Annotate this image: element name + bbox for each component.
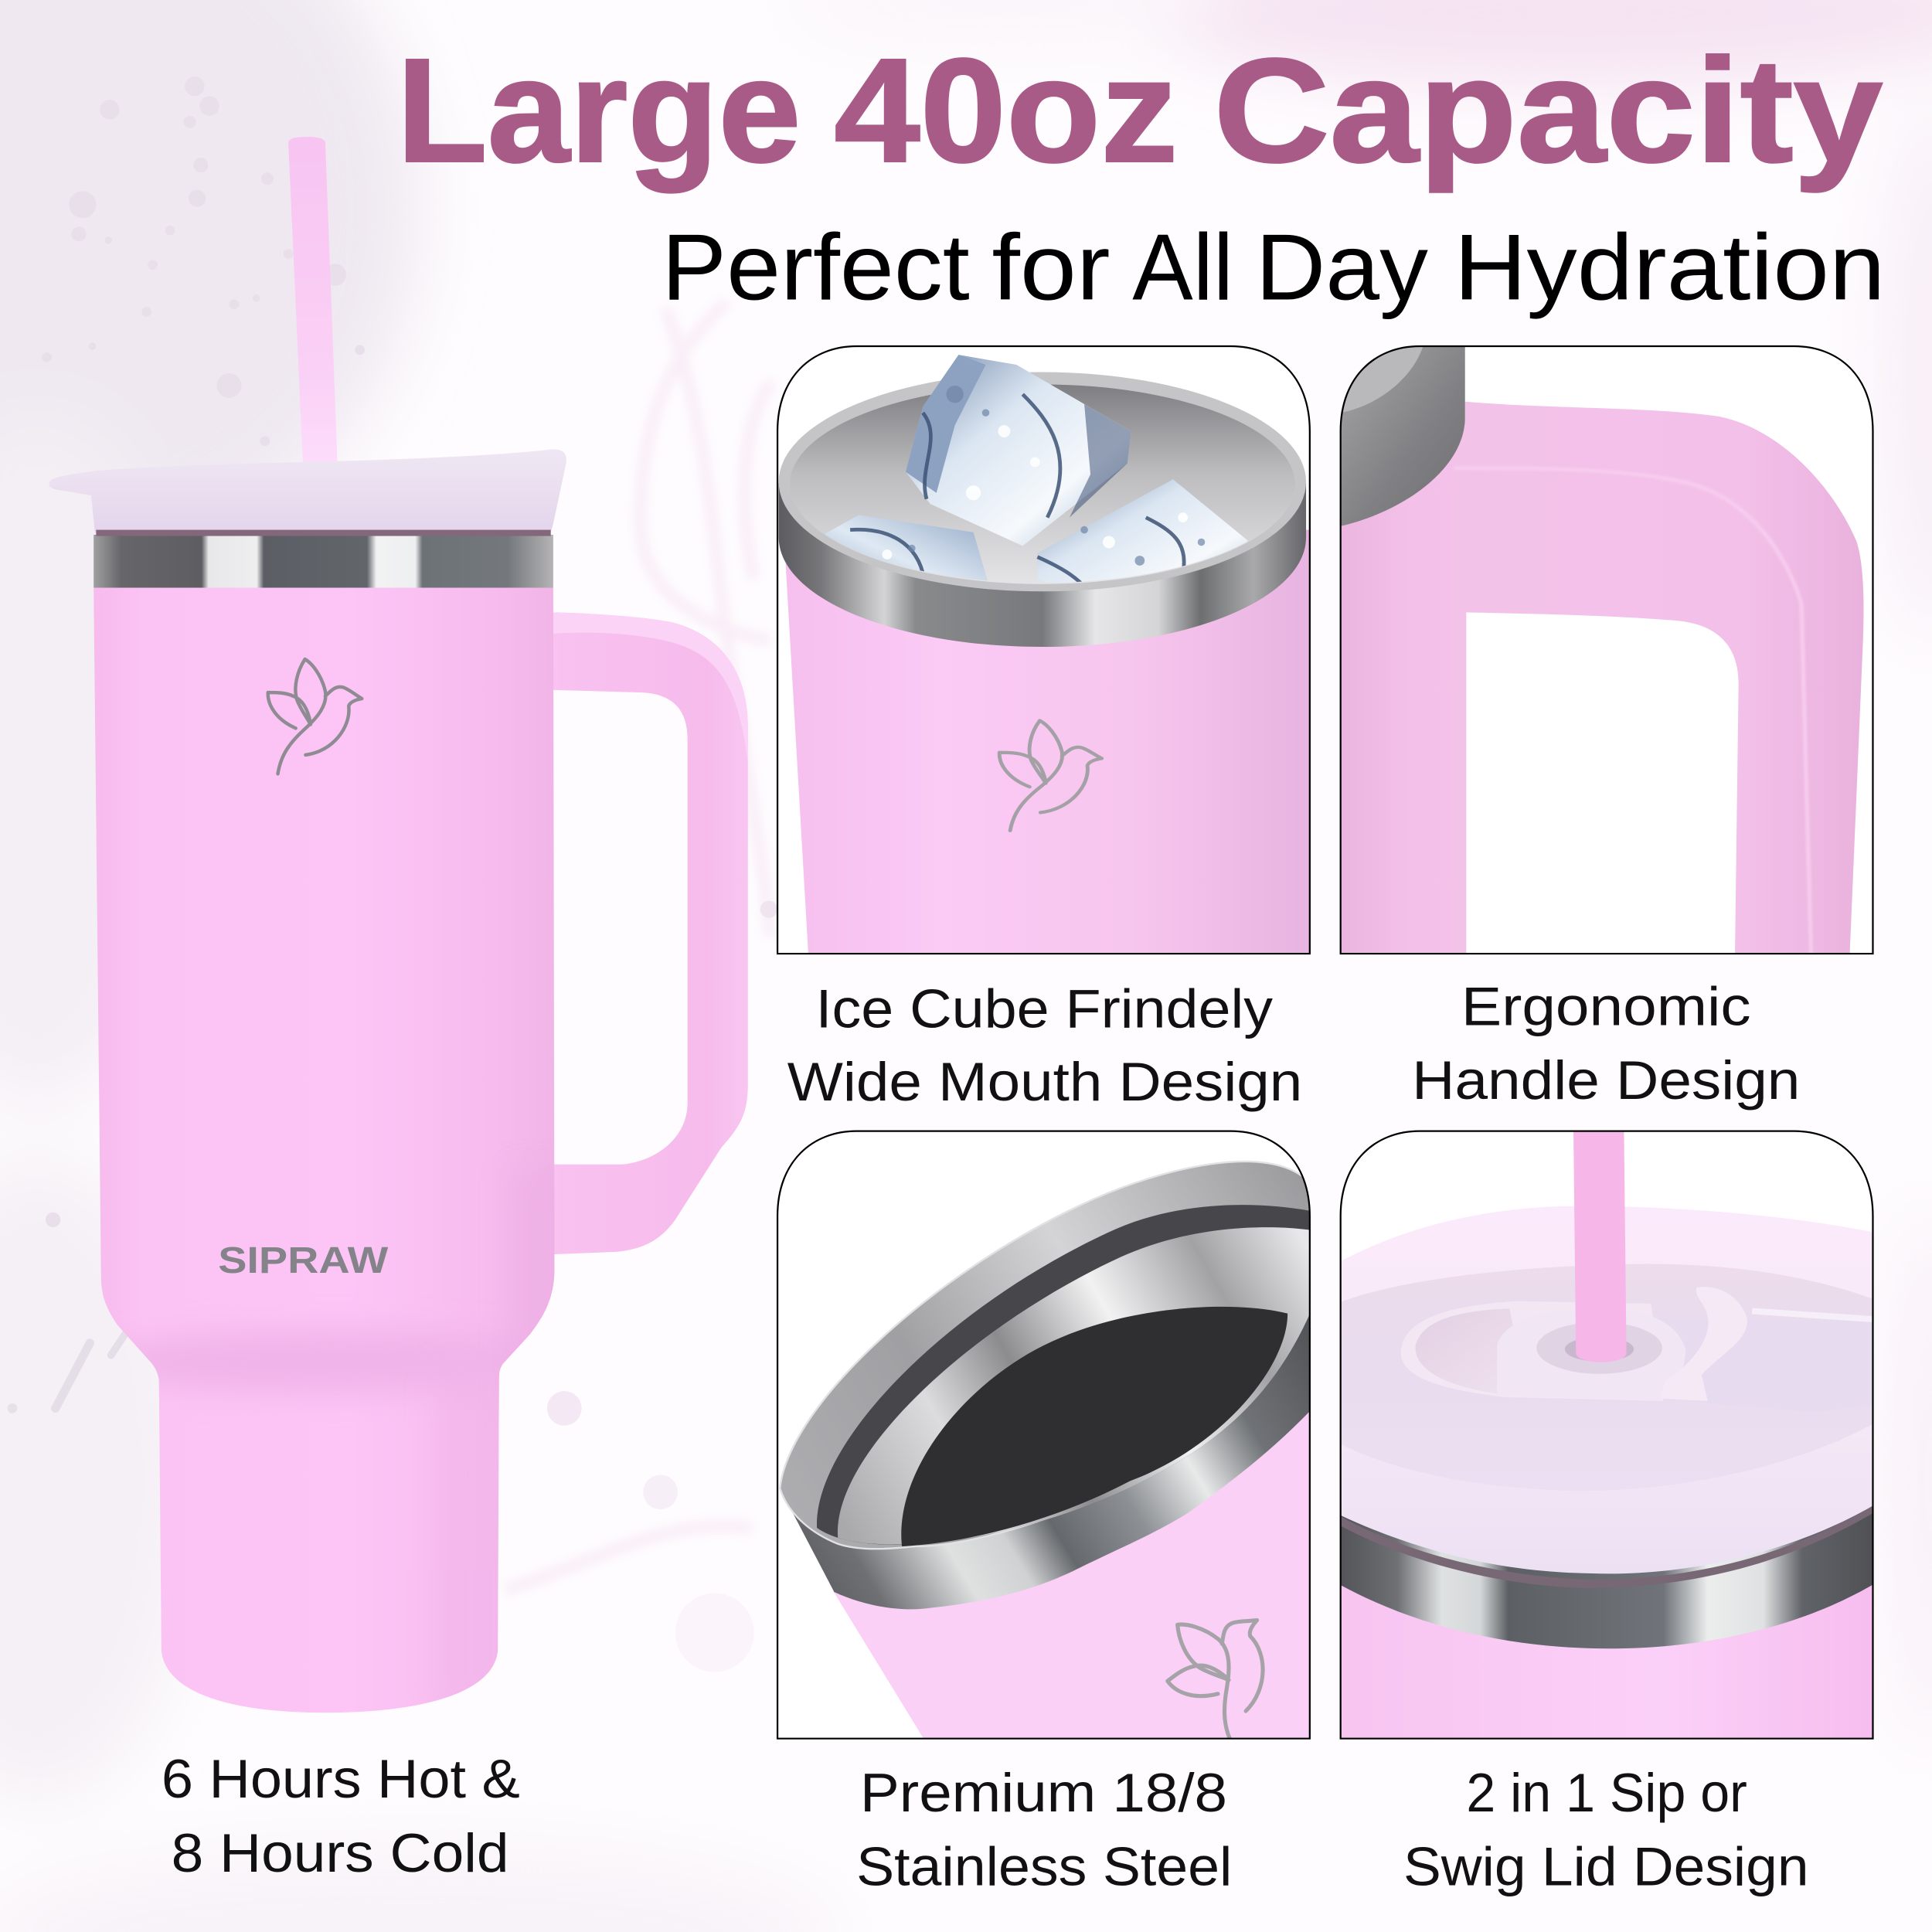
body bbox=[87, 579, 573, 1725]
lid bbox=[1331, 1206, 1885, 1573]
slider plate bbox=[1497, 1308, 1685, 1401]
caption: stainless steel bbox=[856, 1762, 1232, 1896]
subtitle bbox=[662, 214, 1885, 319]
lid recess bbox=[1331, 1264, 1885, 1491]
right plate bbox=[1651, 1318, 1879, 1412]
steel band bbox=[780, 1281, 1325, 1609]
tab bbox=[1661, 1287, 1747, 1401]
caption: ergonomic handle: Ergonomic bbox=[1461, 976, 1751, 1037]
bird logo bbox=[268, 659, 362, 774]
panel: ergonomic handle bbox=[1331, 346, 1872, 961]
subtitle: Hydration bbox=[1454, 214, 1885, 319]
handle bbox=[543, 612, 748, 1254]
gasket bbox=[1331, 1497, 1885, 1588]
straw bbox=[1573, 1131, 1627, 1362]
caption: hot and cold bbox=[162, 1748, 520, 1883]
straw bbox=[288, 137, 338, 468]
sip opening bbox=[1401, 1301, 1663, 1401]
handle bbox=[1465, 402, 1864, 961]
steel band bbox=[1331, 1497, 1885, 1648]
straw port bbox=[1536, 1322, 1662, 1374]
inner dark ring bbox=[817, 1205, 1325, 1545]
bird logo bbox=[999, 720, 1102, 831]
caption: sip or swig lid bbox=[1403, 1762, 1809, 1896]
caption: wide mouth: Ice Cube Frindely bbox=[815, 978, 1273, 1039]
caption: hot and cold: 8 Hours Cold bbox=[172, 1822, 509, 1883]
brand name: SIPRAW bbox=[218, 1240, 389, 1281]
inner wall bbox=[838, 1227, 1325, 1544]
tumbler body bbox=[833, 1393, 1318, 1743]
steel rim bbox=[1331, 346, 1465, 527]
tumbler body bbox=[1331, 1553, 1885, 1750]
title: 40oz bbox=[834, 28, 1178, 193]
caption: stainless steel: Premium 18/8 bbox=[860, 1762, 1227, 1823]
lid bbox=[49, 449, 566, 532]
steel rim bbox=[779, 483, 1306, 647]
caption: hot and cold: 6 Hours Hot & bbox=[162, 1748, 520, 1809]
subtitle: Day bbox=[1256, 214, 1428, 319]
caption: ergonomic handle bbox=[1412, 976, 1800, 1111]
caption: wide mouth: Wide Mouth Design bbox=[787, 1051, 1302, 1112]
tumbler body bbox=[784, 530, 1314, 954]
panel: stainless steel bbox=[777, 1131, 1325, 1755]
tumbler body bbox=[1331, 419, 1466, 961]
title: Large bbox=[396, 28, 801, 193]
title: Capacity bbox=[1213, 28, 1883, 193]
subtitle: Perfect bbox=[662, 214, 970, 319]
main tumbler product bbox=[49, 137, 748, 1725]
steel band bbox=[94, 535, 553, 588]
subtitle: for bbox=[992, 214, 1111, 319]
rim bbox=[780, 1162, 1325, 1549]
panel: wide mouth bbox=[777, 346, 1314, 954]
caption: ergonomic handle: Handle Design bbox=[1412, 1049, 1800, 1111]
title bbox=[396, 28, 1883, 193]
caption: sip or swig lid: Swig Lid Design bbox=[1403, 1835, 1809, 1896]
caption: sip or swig lid: 2 in 1 Sip or bbox=[1466, 1762, 1747, 1823]
panel: sip or swig lid bbox=[1331, 1131, 1885, 1750]
subtitle: All bbox=[1132, 214, 1233, 319]
dark interior bbox=[901, 1307, 1287, 1546]
caption: stainless steel: Stainless Steel bbox=[856, 1835, 1232, 1896]
bird logo bbox=[1144, 1584, 1310, 1755]
ice cubes bbox=[825, 355, 1248, 583]
caption: wide mouth bbox=[787, 978, 1302, 1112]
